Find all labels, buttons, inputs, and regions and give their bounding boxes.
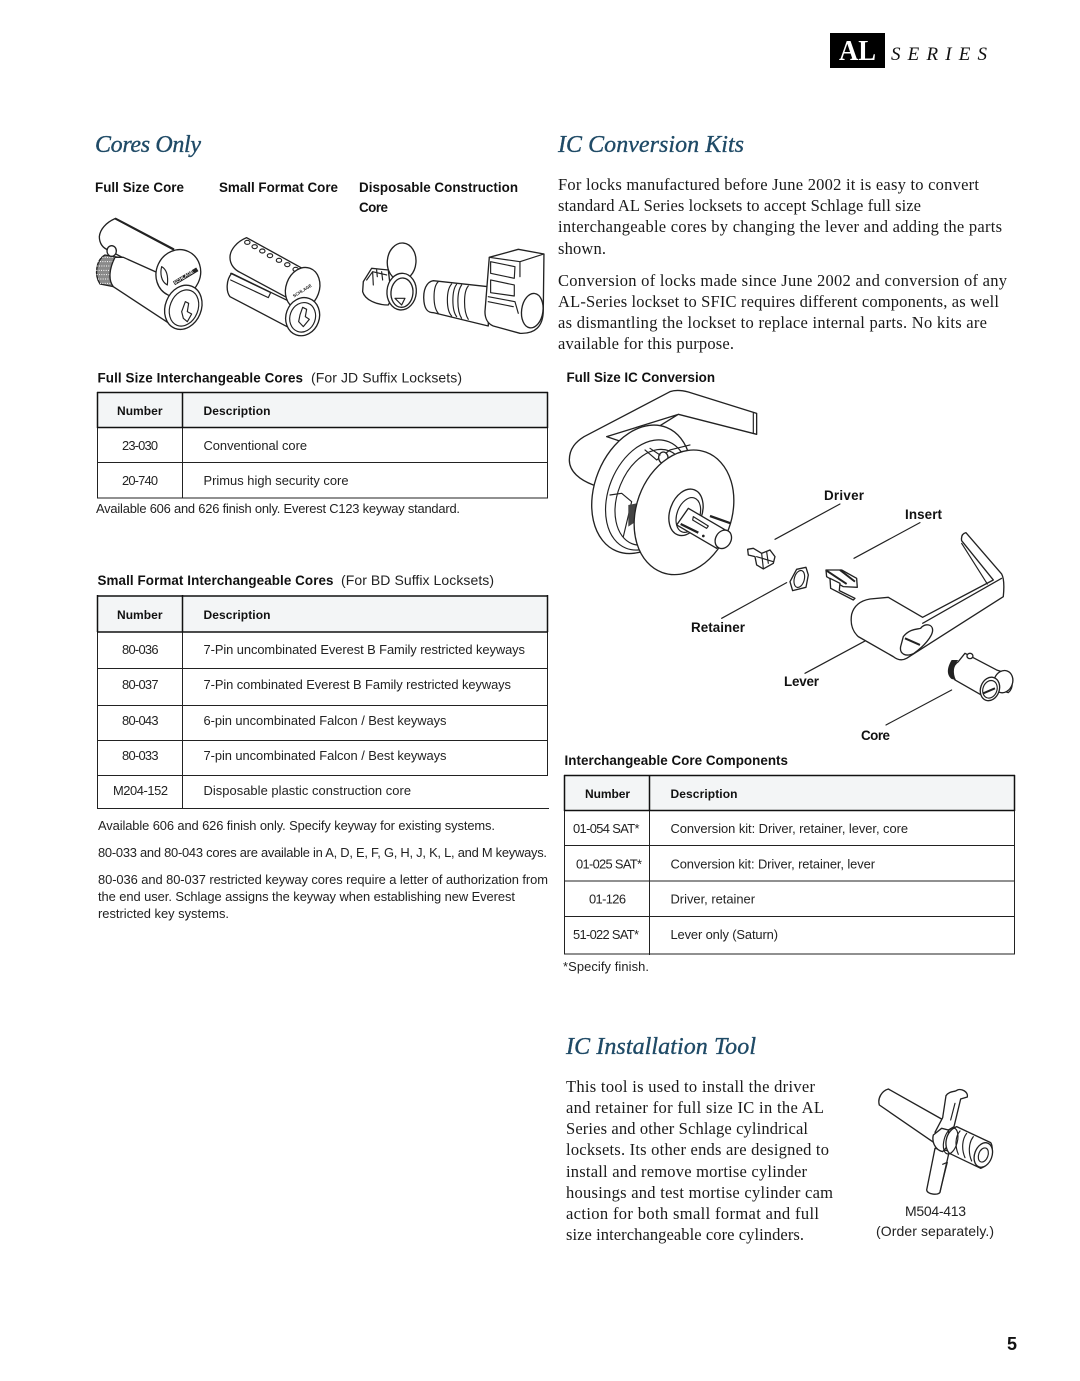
logo: AL Series: AL xyxy=(839,35,876,67)
note: finish and keyway: Available 606 and 626 finish only. Everest C123 keyway standard. xyxy=(96,501,460,516)
lever behind rosette xyxy=(569,390,757,485)
icon: small format core xyxy=(227,238,326,341)
panel: IC conversion kits xyxy=(557,132,1016,974)
table: full size interchangeable cores: 20-740 xyxy=(122,473,158,488)
text block: conversion intro: available for this purpose. xyxy=(558,334,734,353)
callout labels: driver, insert, retainer, lever, core: Driver xyxy=(824,488,865,503)
callout labels: driver, insert, retainer, lever, core: Retainer xyxy=(691,620,746,635)
heading: IC installation tool: IC Installation Tool xyxy=(565,1034,756,1060)
text block: tool description: install and remove mortise cylinder xyxy=(566,1162,808,1181)
text block: tool description: and retainer for full size IC in the AL xyxy=(566,1098,824,1117)
table: full size interchangeable cores: Conventional core xyxy=(204,438,307,453)
table: interchangeable core components: 01-025 SAT* xyxy=(576,856,642,872)
text block: conversion intro: standard AL Series locksets to accept Schlage full size xyxy=(558,196,921,215)
back rosette xyxy=(573,410,710,569)
text block: conversion intro: AL-Series lockset to SFIC requires different components, as well xyxy=(558,292,999,311)
table heading: interchangeable core components: Interchangeable Core Components xyxy=(564,753,788,768)
notes: small format availability: 80-036 and 80-037 restricted keyway cores require a letter of authorization from xyxy=(98,872,548,887)
icon: core xyxy=(948,653,1016,703)
table heading: small format interchangeable cores: (For BD Suffix Locksets) xyxy=(341,572,494,588)
table: full size interchangeable cores: Primus high security core xyxy=(204,473,348,488)
notes: small format availability: the end user. Schlage assigns the keyway when establishing new Everest xyxy=(98,889,515,904)
page number: 5 xyxy=(1007,1334,1017,1354)
core column labels: Small Format Core xyxy=(219,180,338,195)
text block: tool description: size interchangeable core cylinders. xyxy=(566,1225,804,1244)
table: interchangeable core components xyxy=(564,775,1015,955)
core column labels: Disposable Construction xyxy=(359,180,518,195)
notes: small format availability: Available 606 and 626 finish only. Specify keyway for existing systems. xyxy=(98,818,495,833)
notes: small format availability: restricted key systems. xyxy=(98,906,229,921)
icon: driver xyxy=(748,548,775,569)
icon: disposable construction core xyxy=(363,242,545,333)
text block: tool description: This tool is used to install the driver xyxy=(566,1077,816,1096)
illustrations of the three cores xyxy=(96,218,545,341)
label: full size IC conversion: Full Size IC Conversion xyxy=(566,370,715,385)
core column labels: Full Size Core xyxy=(95,180,184,195)
icon: full size core: SCHLAGE xyxy=(173,269,194,285)
table: interchangeable core components: Description xyxy=(670,787,738,801)
callout labels: driver, insert, retainer, lever, core: Insert xyxy=(905,507,943,522)
table: full size interchangeable cores: Number xyxy=(117,404,163,418)
table heading: full size interchangeable cores xyxy=(98,370,462,386)
text block: conversion intro xyxy=(558,175,1008,353)
icon: lever xyxy=(851,533,1004,660)
table: small format interchangeable cores: 80-036 xyxy=(122,642,158,657)
icon: retainer xyxy=(790,567,808,591)
spindle xyxy=(663,484,735,552)
table: small format interchangeable cores: 80-033 xyxy=(122,748,158,763)
core column labels: Core xyxy=(359,200,388,215)
icon: small format core: SCHLAGE xyxy=(292,283,313,299)
logo: AL Series xyxy=(830,33,988,68)
table: small format interchangeable cores: 6-pin uncombinated Falcon / Best keyways xyxy=(204,713,446,728)
core column labels xyxy=(95,180,518,215)
table: interchangeable core components: 01-126 xyxy=(589,892,626,906)
leader lines xyxy=(722,504,952,725)
table heading: full size interchangeable cores: Full Size Interchangeable Cores xyxy=(98,370,303,386)
panel: IC installation tool xyxy=(565,1034,996,1244)
table heading: full size interchangeable cores: (For JD Suffix Locksets) xyxy=(311,370,462,386)
footnote: specify finish: *Specify finish. xyxy=(563,959,649,974)
caption: part number xyxy=(876,1203,994,1239)
text block: tool description: housings and test mortise cylinder cam xyxy=(566,1183,833,1202)
icon: full size core xyxy=(96,218,209,335)
table: interchangeable core components: Conversion kit: Driver, retainer, lever xyxy=(670,856,876,872)
table: small format interchangeable cores: 80-043 xyxy=(122,713,158,728)
exploded diagram: lockset conversion xyxy=(569,390,1016,725)
callout labels: driver, insert, retainer, lever, core: Core xyxy=(861,728,890,743)
table heading: small format interchangeable cores xyxy=(98,572,494,588)
heading: IC conversion kits: IC Conversion Kits xyxy=(557,132,744,158)
table: small format interchangeable cores: 7-Pin uncombinated Everest B Family restricted keyways xyxy=(204,642,525,657)
caption: part number: (Order separately.) xyxy=(876,1223,994,1239)
notes: small format availability xyxy=(98,818,548,921)
text block: conversion intro: interchangeable cores by changing the lever and adding the parts xyxy=(558,217,1002,236)
table: small format interchangeable cores: M204-152 xyxy=(113,783,168,798)
table: small format interchangeable cores: Description xyxy=(204,608,270,622)
notes: small format availability: 80-033 and 80-043 cores are available in A, D, E, F, G, H, J, K, L, and M keyways. xyxy=(98,845,547,860)
icon: insert xyxy=(826,570,857,600)
table: full size interchangeable cores: Description xyxy=(204,404,270,418)
table: interchangeable core components: 51-022 SAT* xyxy=(573,927,639,942)
logo: AL Series: SERIES xyxy=(891,44,988,65)
text block: conversion intro: For locks manufactured before June 2002 it is easy to convert xyxy=(558,175,979,194)
table: small format interchangeable cores xyxy=(97,595,549,809)
table: small format interchangeable cores: Disposable plastic construction core xyxy=(204,783,411,798)
panel: cores only xyxy=(95,132,549,921)
table: interchangeable core components: 01-054 SAT* xyxy=(573,821,640,836)
front rosette xyxy=(617,436,751,589)
text block: tool description xyxy=(566,1077,833,1244)
text block: tool description: action for both small format and full xyxy=(566,1204,819,1223)
text block: tool description: Series and other Schlage cylindrical xyxy=(566,1119,808,1138)
table: full size interchangeable cores xyxy=(97,392,548,498)
table: small format interchangeable cores: 7-pin uncombinated Falcon / Best keyways xyxy=(204,748,446,763)
table: small format interchangeable cores: 80-037 xyxy=(122,677,158,692)
text block: conversion intro: Conversion of locks made since June 2002 and conversion of any xyxy=(558,271,1008,290)
table heading: small format interchangeable cores: Small Format Interchangeable Cores xyxy=(98,573,334,588)
heading: cores only: Cores Only xyxy=(95,132,201,158)
caption: part number: M504-413 xyxy=(905,1203,966,1219)
callout labels: driver, insert, retainer, lever, core: Lever xyxy=(784,674,820,689)
table: interchangeable core components: Driver, retainer xyxy=(670,892,756,906)
text block: conversion intro: shown. xyxy=(558,239,606,258)
table: small format interchangeable cores: Number xyxy=(117,608,163,622)
table: interchangeable core components: Conversion kit: Driver, retainer, lever, core xyxy=(670,821,908,836)
table: interchangeable core components: Number xyxy=(585,787,630,801)
callout labels: driver, insert, retainer, lever, core xyxy=(691,488,943,743)
text block: conversion intro: as dismantling the lockset to replace internal parts. No kits are xyxy=(558,313,987,332)
table: interchangeable core components: Lever only (Saturn) xyxy=(670,927,778,942)
table: small format interchangeable cores: 7-Pin combinated Everest B Family restricted keyways xyxy=(204,677,511,692)
icon: installation tool xyxy=(879,1089,996,1194)
table: full size interchangeable cores: 23-030 xyxy=(122,438,158,453)
text block: tool description: locksets. Its other ends are designed to xyxy=(566,1140,829,1159)
